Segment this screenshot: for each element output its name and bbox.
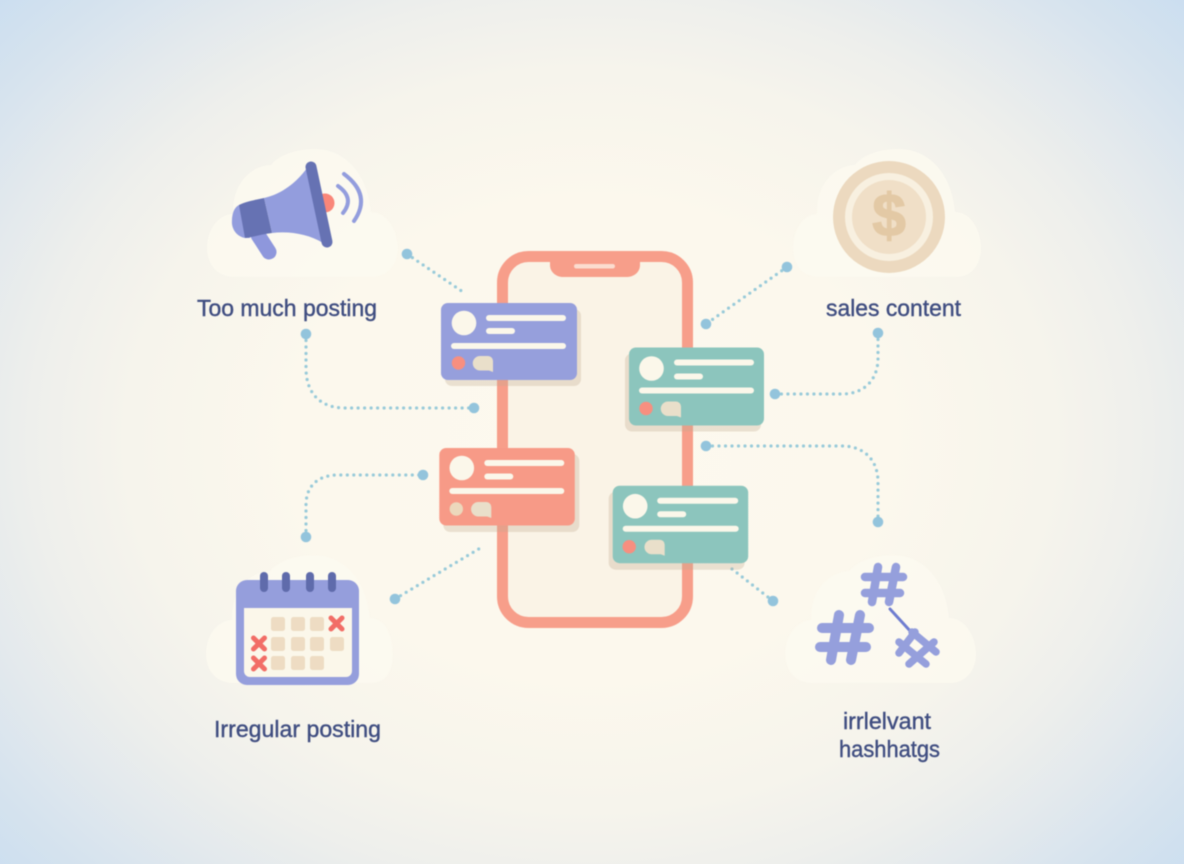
connector: fourth card to hashtags [732,569,778,606]
icon: dollar coin: $ [872,182,906,249]
connector: calendar to phone diagonal [390,547,482,604]
cloud: bottom right [785,555,976,683]
phone notch [550,260,640,277]
post card: teal upper [625,348,764,432]
connector: sales content label to card [770,328,883,399]
cloud: top left [207,149,398,277]
cloud: top right [793,149,981,277]
icon: calendar [236,572,359,685]
label: irrelevant hashtags: hashhatgs [839,736,940,762]
phone speaker [574,264,615,268]
connector: coin to phone [701,262,792,329]
connector: too much posting label to phone [301,329,479,413]
post card: coral [439,448,579,532]
connector: calendar to third card [301,470,428,542]
label: too much posting: Too much posting [197,295,377,321]
label: irrelevant hashtags [839,708,940,762]
phone frame [502,256,688,622]
post card: teal lower [609,486,748,570]
label: irrelevant hashtags: irrlelvant [843,708,932,734]
icon: megaphone [232,167,361,252]
phone [502,256,688,622]
connector: phone to hashtags [701,441,883,527]
icon: dollar coin [833,161,945,273]
connector: megaphone to first card [402,249,466,294]
cloud: bottom left [206,555,393,683]
icon: hashtags [820,567,936,664]
label: irregular posting: Irregular posting [214,716,381,742]
label: sales content: sales content [826,295,962,321]
post card: purple [441,303,581,386]
